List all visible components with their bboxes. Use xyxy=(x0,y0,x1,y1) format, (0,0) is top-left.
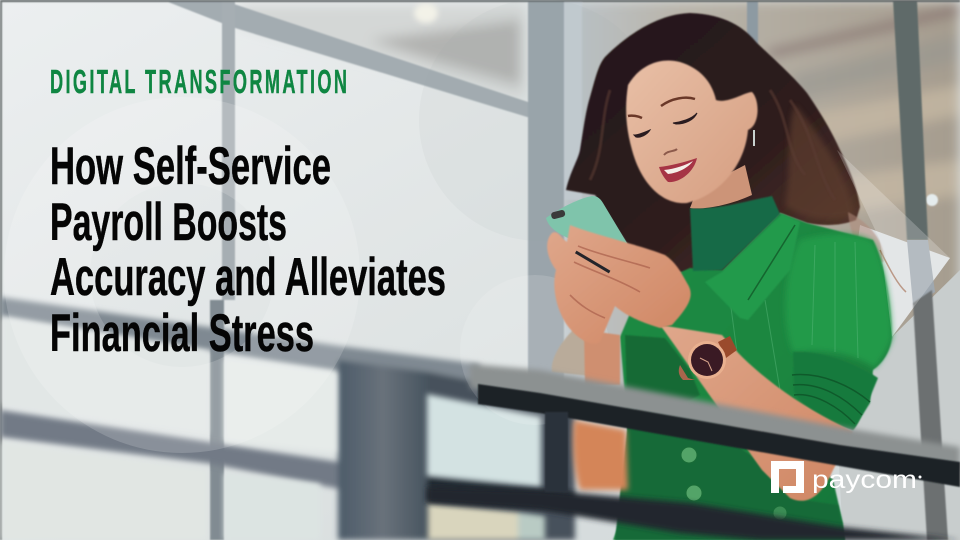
title: Financial Stress xyxy=(50,304,314,363)
icon: paycom mark xyxy=(771,461,804,493)
blurred mullions, left xyxy=(0,297,575,540)
jacket buttons xyxy=(681,447,787,520)
title: How Self-Service xyxy=(50,137,331,196)
hair wisps at shoulder xyxy=(848,212,884,262)
title: Accuracy and Alleviates xyxy=(50,248,446,307)
jacket shadows xyxy=(624,334,700,400)
right forearm xyxy=(660,325,853,501)
nose xyxy=(664,149,677,155)
face and neck xyxy=(690,165,752,208)
hair xyxy=(566,13,860,275)
translucent circles overlay xyxy=(4,0,661,453)
hair curl behind arm xyxy=(552,331,586,376)
title: Payroll Boosts xyxy=(50,193,287,252)
jacket pinstripes xyxy=(730,242,858,390)
background right beyond windows xyxy=(240,0,960,400)
earring xyxy=(753,130,755,146)
hair strands xyxy=(588,89,802,180)
jacket body xyxy=(613,213,892,540)
lit window panes xyxy=(2,318,545,540)
photo subject: woman with phone xyxy=(546,13,906,540)
paycom logo xyxy=(771,461,922,494)
sleeve highlight xyxy=(786,234,892,368)
foreground railings xyxy=(427,364,960,540)
smile xyxy=(659,158,697,182)
watch xyxy=(679,336,737,380)
large ring xyxy=(4,97,360,453)
lapel xyxy=(705,214,800,320)
wordmark: paycom xyxy=(812,466,917,494)
lower right panes xyxy=(830,270,960,540)
turtleneck xyxy=(690,196,780,271)
translucent triangle over shoulder xyxy=(837,150,950,337)
eyebrow: digital transformation: DIGITAL TRANSFORMATION xyxy=(50,63,347,100)
phone xyxy=(546,196,627,244)
hands xyxy=(547,225,691,344)
eyes and brows xyxy=(628,98,695,118)
left forearm xyxy=(584,330,620,385)
sleeve cuff xyxy=(793,352,878,430)
title xyxy=(50,137,446,363)
